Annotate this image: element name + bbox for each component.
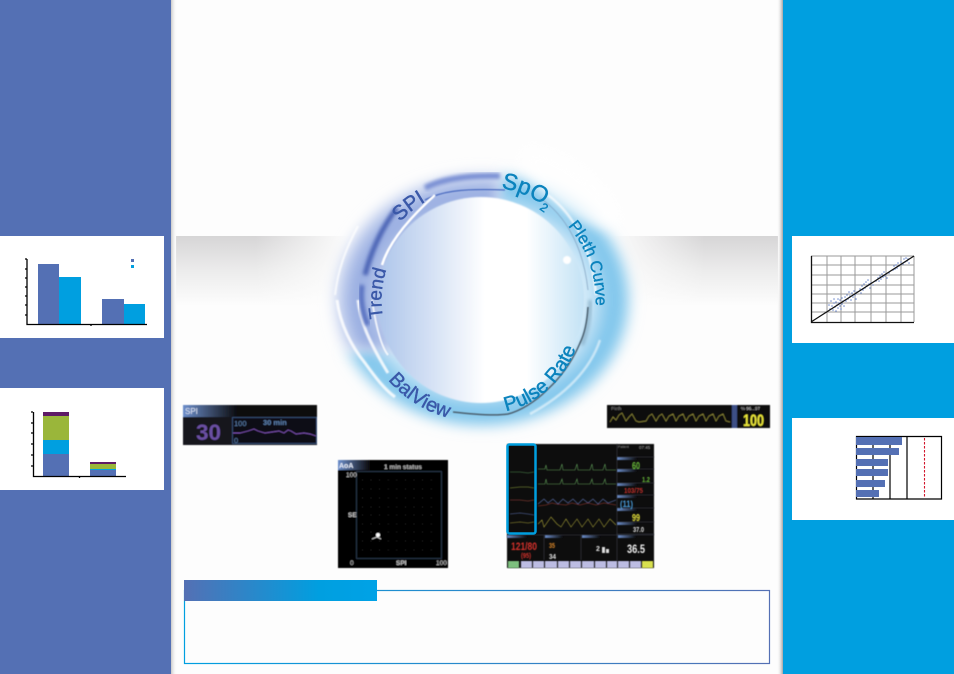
AoA BalView monitor screenshot (338, 460, 448, 568)
parameter column: (95) (521, 553, 531, 560)
parameter column: 103/75 (624, 488, 643, 495)
SPI monitor screenshot (183, 405, 317, 445)
patient monitor screenshot (507, 444, 654, 568)
pleth monitor screenshot: % 96...97 (741, 406, 761, 411)
panel: right column (783, 0, 954, 674)
ring glow (329, 134, 635, 431)
menu buttons (508, 561, 653, 568)
panel: horizontal bar chart (792, 418, 954, 520)
AoA BalView monitor screenshot: SPI (396, 560, 407, 567)
SPI monitor screenshot: 30 min (263, 418, 287, 427)
ring label: SpO2 (502, 174, 551, 215)
header strip (183, 405, 238, 417)
panel: grouped bar chart (0, 236, 164, 338)
callout box (184, 580, 770, 664)
ring graphic with labels (328, 167, 638, 435)
parameter header strips (507, 457, 637, 538)
bars (38, 264, 145, 324)
parameter column: 1.2 (642, 475, 650, 484)
Trend highlight box (508, 444, 536, 534)
plot frame (856, 436, 942, 499)
panel: left column (0, 0, 171, 674)
parameter column: 34 (549, 554, 556, 561)
grid (811, 256, 914, 322)
parameter column: 99 (632, 513, 640, 524)
pleth monitor screenshot: Pleth (611, 406, 622, 411)
scatter points (829, 258, 909, 311)
pleth monitor screenshot (607, 405, 770, 430)
trend box (232, 418, 316, 444)
parameter column: 07:45 (639, 445, 651, 450)
AoA BalView monitor screenshot: AoA (339, 463, 353, 470)
ring label: SpO2: SpO (502, 174, 548, 202)
status marker (372, 533, 381, 539)
ring label: Trend: Trend (368, 267, 386, 320)
AoA BalView monitor screenshot: 100 (436, 560, 447, 567)
stacked bars (43, 412, 116, 476)
parameter column: 60 (632, 461, 640, 472)
reference line (924, 438, 926, 498)
pleth waveform (610, 413, 730, 422)
parameter column: Patient (618, 445, 629, 449)
SPI monitor screenshot: 100 (234, 419, 247, 428)
parameter column (507, 444, 654, 568)
ring label: SPI: SPI (392, 190, 424, 220)
axes (31, 412, 126, 478)
parameter column: 35 (549, 543, 555, 550)
parameter column: 36.5 (627, 542, 645, 556)
legend (131, 259, 134, 268)
ring label: SpO2: 2 (537, 200, 551, 215)
AoA BalView monitor screenshot: 1 min status (384, 464, 422, 471)
plot frame (356, 472, 442, 558)
SpO2 value: 100 (743, 411, 764, 430)
SPI monitor screenshot: 0 (234, 436, 238, 445)
axes (25, 259, 147, 326)
axes and identity line (811, 256, 914, 322)
ring label: Pulse Rate: Pulse Rate (504, 346, 575, 412)
panel: scatter plot (792, 236, 954, 343)
waveforms (510, 464, 616, 527)
centre page shadows (171, 0, 783, 674)
ring strokes (335, 176, 600, 415)
ring label: BalView: BalView (388, 372, 452, 418)
parameter column: 37.0 (633, 527, 644, 534)
AoA BalView monitor screenshot: SE (348, 512, 357, 519)
parameter column: 2 (596, 546, 600, 553)
SPI value: 30 (196, 420, 221, 445)
ring inner disc (378, 197, 584, 403)
dot grid (362, 480, 436, 550)
panel: stacked bar chart (0, 388, 164, 490)
SPI monitor screenshot: SPI (185, 407, 198, 416)
parameter column: (11) (620, 499, 633, 509)
bars (856, 437, 902, 497)
trend trace (233, 429, 316, 436)
callout header (184, 580, 377, 601)
grey band behind ring (176, 236, 778, 306)
AoA BalView monitor screenshot: 0 (350, 560, 354, 567)
parameter column: 121/80 (511, 541, 537, 553)
ring label: Pleth Curve: Pleth Curve (568, 220, 605, 306)
AoA BalView monitor screenshot: 100 (346, 472, 357, 479)
